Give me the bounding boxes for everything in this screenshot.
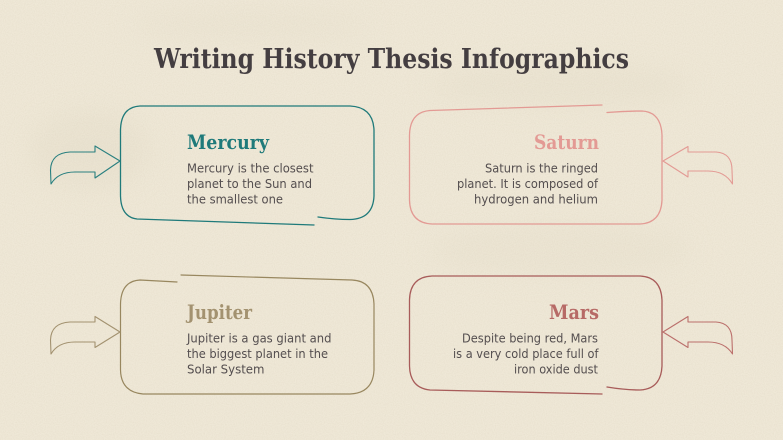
text block: Saturn [457, 160, 599, 206]
text block: Jupiter: the biggest planet in the [187, 346, 328, 361]
panel: Jupiter [50, 275, 374, 394]
text block: Mars: Despite being red, Mars [462, 330, 598, 346]
arrow: Jupiter [50, 316, 120, 354]
heading: Saturn: Saturn [534, 130, 599, 154]
card outline: Mercury [120, 106, 374, 225]
card outline: Mars [410, 276, 662, 394]
text block: Mars: iron oxide dust [514, 362, 598, 376]
text block: Mercury [187, 160, 314, 206]
text block: Jupiter [186, 330, 332, 376]
text block: Saturn: hydrogen and helium [474, 192, 598, 206]
arrow: Saturn [663, 146, 732, 184]
heading: Mercury: Mercury [187, 130, 270, 154]
panel: Mars [410, 276, 732, 394]
card outline: Jupiter [120, 275, 374, 394]
text block: Saturn: Saturn is the ringed [485, 160, 598, 176]
heading: Jupiter: Jupiter [185, 300, 252, 324]
text block: Mercury: Mercury is the closest [187, 160, 314, 176]
title: Writing History Thesis Infographics [153, 44, 629, 75]
panel: Saturn [410, 105, 732, 224]
text block: Mars: is a very cold place full of [453, 346, 599, 361]
text block: Mars [453, 330, 599, 376]
card outline: Saturn [410, 105, 662, 224]
text block: Jupiter: Jupiter is a gas giant and [186, 330, 332, 346]
heading: Mars: Mars [549, 300, 599, 324]
text block: Mercury: planet to the Sun and [187, 176, 312, 191]
arrow: Mercury [50, 146, 120, 184]
text block: Jupiter: Solar System [187, 362, 264, 376]
panel: Mercury [50, 106, 374, 225]
text block: Mercury: the smallest one [187, 192, 283, 206]
arrow: Mars [663, 316, 732, 354]
text block: Saturn: planet. It is composed of [457, 176, 599, 191]
